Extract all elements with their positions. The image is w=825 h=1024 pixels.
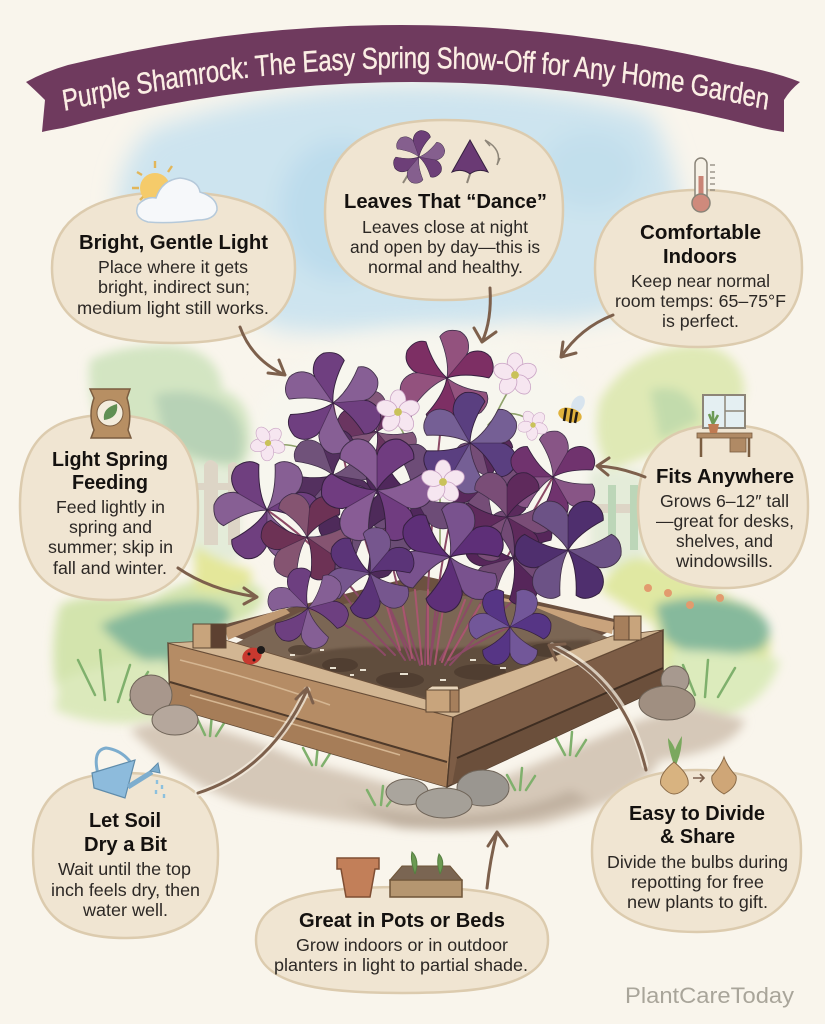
body text: Keep near normal — [631, 271, 770, 291]
body text: and open by day—this is — [350, 237, 540, 257]
body text: water well. — [82, 900, 168, 920]
grass tufts — [78, 650, 735, 806]
body text: medium light still works. — [77, 298, 269, 318]
stems — [267, 378, 568, 665]
fences — [196, 460, 646, 550]
trees and shrubs — [53, 345, 780, 723]
icon: watering can — [92, 748, 164, 798]
flowers in shrub — [644, 584, 724, 609]
body text: Divide the bulbs during — [607, 852, 788, 872]
heading — [629, 802, 765, 848]
body text: —great for desks, — [656, 511, 794, 531]
rocks — [130, 666, 695, 818]
heading: Indoors — [663, 245, 737, 268]
bee — [557, 393, 588, 425]
body text: inch feels dry, then — [51, 880, 200, 900]
panel: great in pots or beds — [256, 852, 548, 993]
icon: open leaf — [383, 124, 456, 193]
body text: spring and — [69, 517, 152, 537]
body text: windowsills. — [675, 551, 773, 571]
heading: Leaves That “Dance” — [344, 190, 547, 213]
rim — [168, 630, 663, 717]
front foliage — [190, 309, 628, 688]
panel: leaves that dance — [325, 120, 563, 300]
icon: sun and cloud — [132, 161, 217, 223]
icon: fertilizer bag — [90, 389, 131, 438]
heading — [52, 448, 168, 494]
body text: planters in light to partial shade. — [274, 955, 528, 975]
purple shamrock plant — [190, 309, 628, 688]
icon: terracotta pot — [337, 858, 379, 897]
watermark: PlantCareToday — [625, 983, 794, 1008]
ground wash — [130, 705, 745, 830]
body text: Grow indoors or in outdoor — [296, 935, 508, 955]
body text: summer; skip in — [48, 537, 173, 557]
icon: bulbs — [661, 736, 736, 794]
heading: Fits Anywhere — [656, 465, 794, 488]
sky wash — [118, 85, 682, 333]
heading: & Share — [660, 825, 735, 848]
body text — [656, 491, 794, 571]
panel: bright gentle light — [52, 161, 295, 343]
heading: Comfortable — [640, 221, 761, 244]
body text: new plants to gift. — [627, 892, 768, 912]
back walls — [210, 575, 628, 712]
body text: normal and healthy. — [368, 257, 523, 277]
back foliage — [270, 381, 577, 620]
icon: folded leaf — [452, 140, 500, 183]
icon: thermometer — [692, 158, 715, 212]
body text: Leaves close at night — [362, 217, 528, 237]
body text: shelves, and — [676, 531, 773, 551]
pink flowers — [242, 353, 555, 504]
icon: desk and window — [697, 395, 752, 457]
body text — [274, 935, 528, 975]
body text: fall and winter. — [53, 558, 167, 578]
heading: Light Spring — [52, 448, 168, 471]
panel: easy to divide and share — [592, 736, 801, 932]
heading: Dry a Bit — [84, 833, 167, 856]
heading: Great in Pots or Beds — [299, 909, 505, 932]
banner title — [26, 25, 800, 132]
ladybug — [240, 645, 265, 667]
heading — [640, 221, 761, 268]
body text: Wait until the top — [58, 859, 191, 879]
right front side — [447, 630, 663, 787]
banner title: Purple Shamrock: The Easy Spring Show-Off for Any Home Garden — [62, 46, 768, 111]
heading: Easy to Divide — [629, 802, 765, 825]
body text: Grows 6–12″ tall — [660, 491, 789, 511]
raised garden bed — [130, 575, 695, 818]
body text — [77, 257, 269, 318]
icon: planter box — [390, 852, 462, 897]
left front side — [168, 643, 453, 787]
body text: Place where it gets — [98, 257, 248, 277]
body text: bright, indirect sun; — [98, 277, 250, 297]
body text: is perfect. — [662, 311, 739, 331]
panel: light spring feeding — [20, 389, 198, 600]
body text: room temps: 65–75°F — [615, 291, 786, 311]
body text — [607, 852, 788, 912]
body text — [48, 497, 173, 578]
watercolor garden background — [53, 85, 780, 830]
heading: Bright, Gentle Light — [79, 231, 268, 254]
body text: repotting for free — [631, 872, 764, 892]
corner posts — [193, 616, 641, 712]
body text — [350, 217, 540, 277]
heading: Feeding — [72, 471, 148, 494]
soil — [226, 590, 614, 708]
panel: fits anywhere — [638, 395, 808, 588]
body text: Feed lightly in — [56, 497, 165, 517]
heading — [84, 809, 167, 856]
heading: Let Soil — [89, 809, 161, 832]
panel: let soil dry a bit — [33, 748, 218, 938]
arrows — [178, 288, 646, 888]
panel: comfortable indoors — [595, 158, 802, 347]
body text — [51, 859, 200, 920]
body text — [615, 271, 786, 331]
